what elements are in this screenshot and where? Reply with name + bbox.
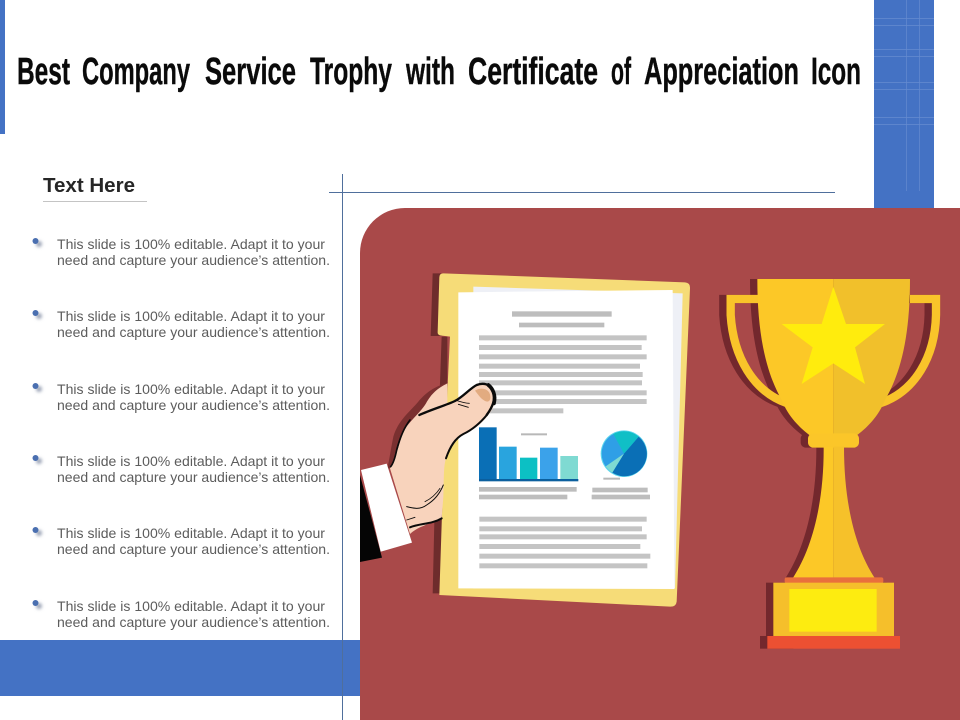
trophy cup xyxy=(757,279,834,437)
bullet 4 xyxy=(32,453,330,485)
top right blue bar xyxy=(874,0,934,208)
title: Trophy xyxy=(310,51,392,93)
title: Service xyxy=(205,51,296,93)
trophy handles xyxy=(731,299,936,403)
bullet 1 xyxy=(32,236,330,268)
upper text lines xyxy=(479,335,647,413)
horizontal rule xyxy=(329,192,835,193)
jacket sleeve xyxy=(360,475,382,562)
bottom blue band xyxy=(0,640,360,696)
thumb nail xyxy=(475,389,490,402)
icon: gold trophy xyxy=(723,279,936,649)
vertical rule xyxy=(342,174,343,720)
trophy stem xyxy=(793,447,834,578)
pie chart xyxy=(601,430,647,480)
title: Appreciation xyxy=(644,51,799,93)
panel: illustration background xyxy=(360,208,960,720)
bullet 5 xyxy=(32,525,330,557)
bullet 6: need and capture your audience’s attention. xyxy=(57,614,330,630)
star xyxy=(782,287,885,384)
bullet 5: need and capture your audience’s attention. xyxy=(57,541,330,557)
bullet 2: This slide is 100% editable. Adapt it to your xyxy=(57,308,325,324)
trophy base xyxy=(773,583,894,636)
bar chart xyxy=(479,427,578,481)
bullet 3 xyxy=(32,381,330,413)
bullet list xyxy=(32,236,330,630)
title: Best xyxy=(17,51,70,93)
bullet 5: This slide is 100% editable. Adapt it to your xyxy=(57,525,325,541)
lower text lines xyxy=(479,517,650,568)
folder xyxy=(438,273,690,607)
hand outlines xyxy=(391,384,495,527)
bullet 6: This slide is 100% editable. Adapt it to your xyxy=(57,598,325,614)
shirt cuff xyxy=(361,464,412,552)
left accent bar xyxy=(0,0,5,134)
title: with xyxy=(405,51,455,93)
title: of xyxy=(611,51,631,93)
document heading lines xyxy=(512,311,612,327)
folder shadow xyxy=(431,273,447,593)
title xyxy=(17,51,861,93)
bullet 1: need and capture your audience’s attention. xyxy=(57,252,330,268)
hand shadow xyxy=(387,383,448,468)
title: Company xyxy=(82,51,190,93)
trophy collar xyxy=(808,433,859,448)
trophy foot xyxy=(767,636,900,649)
icon: hand holding certificate folder xyxy=(360,273,690,607)
back sheet xyxy=(473,287,683,588)
certificate sheet xyxy=(458,290,674,589)
title: Icon xyxy=(811,51,861,93)
bullet 4: This slide is 100% editable. Adapt it to your xyxy=(57,453,325,469)
bullet 2: need and capture your audience’s attention. xyxy=(57,324,330,340)
chart caption lines xyxy=(479,487,650,499)
bullet 2 xyxy=(32,308,330,340)
title: Certificate xyxy=(468,51,598,93)
bullet 3: need and capture your audience’s attention. xyxy=(57,397,330,413)
bullet 1: This slide is 100% editable. Adapt it to your xyxy=(57,236,325,252)
trophy base cap xyxy=(785,577,883,583)
bullet 4: need and capture your audience’s attention. xyxy=(57,469,330,485)
heading: Text Here: Text Here xyxy=(43,175,135,197)
trophy shadow xyxy=(723,279,929,649)
bullet 6 xyxy=(32,598,330,630)
trophy plaque xyxy=(789,589,877,632)
hand xyxy=(390,383,495,534)
bullet 3: This slide is 100% editable. Adapt it to your xyxy=(57,381,325,397)
